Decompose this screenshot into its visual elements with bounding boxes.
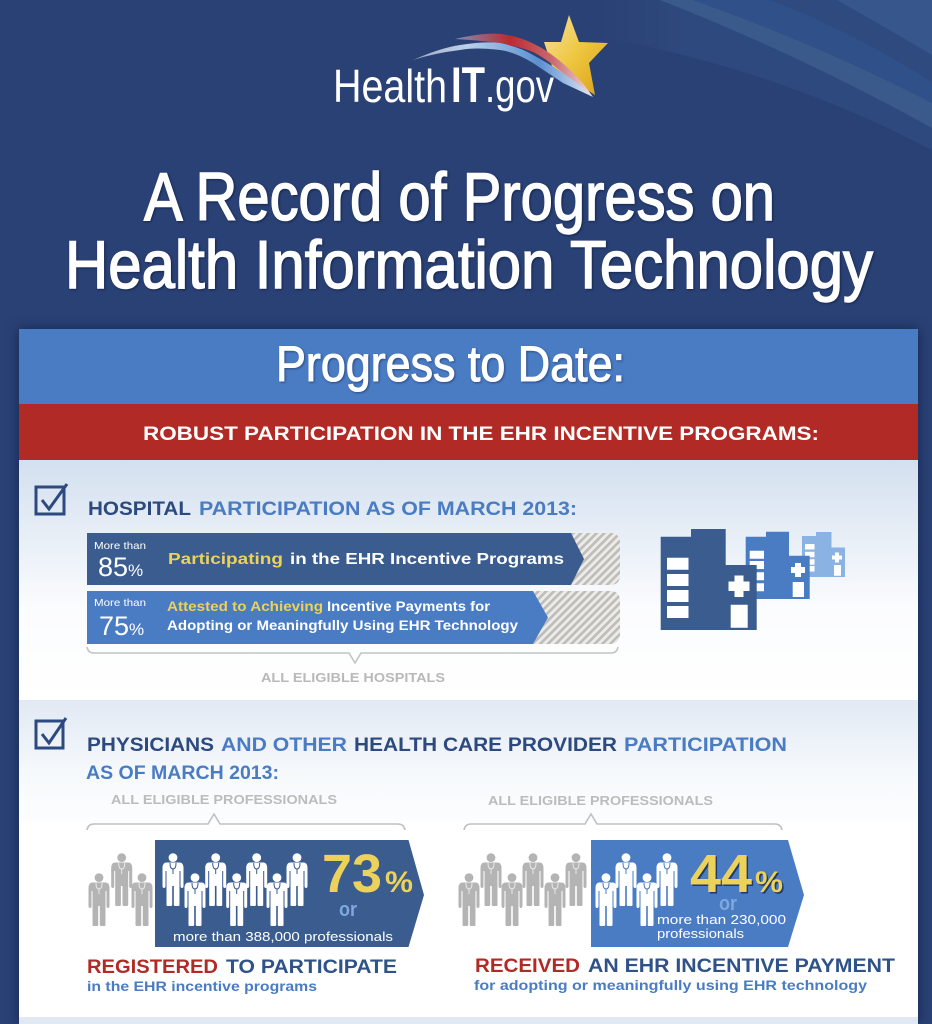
heading: physicians participation: PHYSICIANS bbox=[87, 735, 214, 756]
section: physician participation bbox=[19, 700, 918, 994]
caption: received an EHR incentive payment bbox=[474, 956, 895, 993]
caption: received an EHR incentive payment: RECEIVED bbox=[475, 956, 580, 977]
icon: checkbox bbox=[36, 718, 66, 748]
icon: small hospital bbox=[802, 532, 845, 577]
stat: 44 percent: 44 bbox=[690, 844, 752, 904]
arrow: 73 percent bbox=[155, 840, 424, 947]
title bbox=[65, 159, 873, 303]
panel background bbox=[19, 329, 918, 1024]
bar: 85 percent participating: Participating bbox=[168, 551, 283, 568]
logo wordmark: Health bbox=[333, 60, 447, 112]
caption: registered to participate: REGISTERED bbox=[87, 957, 218, 978]
caption: received an EHR incentive payment: for adopting or meaningfully using EHR technology bbox=[474, 977, 867, 993]
logo wordmark: .gov bbox=[485, 60, 554, 112]
logo: HealthIT.gov bbox=[333, 15, 608, 113]
stat: 44 percent: % bbox=[756, 868, 784, 900]
stat: 44 percent: % bbox=[755, 866, 783, 899]
bar: 85 percent participating: More than bbox=[94, 540, 146, 552]
bar: 75 percent attested: Attested to Achieving bbox=[167, 599, 323, 614]
icon: star bbox=[544, 15, 608, 95]
caption: registered to participate bbox=[87, 957, 397, 994]
caption: registered to participate: TO PARTICIPATE bbox=[226, 957, 397, 978]
heading: physicians participation: HEALTH CARE PROVIDER bbox=[354, 735, 617, 756]
bar: 75 percent attested: More than bbox=[94, 597, 146, 609]
label: all eligible professionals right: ALL ELIGIBLE PROFESSIONALS bbox=[488, 793, 713, 808]
heading: physicians participation: AS OF MARCH 2013: bbox=[86, 763, 279, 784]
label: or: or bbox=[339, 899, 357, 921]
bracket: right bbox=[464, 814, 782, 830]
decorative swooshes bbox=[600, 0, 932, 150]
bar: 85 percent participating: 85% bbox=[98, 552, 143, 582]
panel: progress to date bbox=[19, 329, 918, 1024]
logo wordmark: IT bbox=[451, 57, 485, 113]
bar: 75 percent attested: Adopting or Meaningfully Using EHR Technology bbox=[167, 618, 519, 633]
label: 230,000 professionals: more than 230,000 bbox=[657, 912, 786, 927]
red band: robust participation: ROBUST PARTICIPATION IN THE EHR INCENTIVE PROGRAMS: bbox=[143, 423, 819, 445]
icon: medium hospital bbox=[746, 532, 810, 599]
label: all eligible hospitals: ALL ELIGIBLE HOSPITALS bbox=[261, 670, 445, 685]
label: 388,000 professionals: more than 388,000 professionals bbox=[173, 929, 394, 944]
heading: physicians participation bbox=[86, 735, 787, 784]
people: white left bbox=[162, 853, 308, 926]
bar: 75 percent attested: Incentive Payments for bbox=[327, 599, 491, 614]
icon: blue swoosh bbox=[413, 42, 593, 97]
bracket: all eligible hospitals bbox=[87, 647, 618, 663]
heading: physicians participation: PARTICIPATION bbox=[624, 735, 787, 756]
icon: red swoosh bbox=[455, 34, 593, 97]
red band: robust participation bbox=[19, 404, 918, 460]
label: 230,000 professionals: professionals bbox=[657, 926, 745, 941]
bar: 75 percent attested bbox=[87, 591, 620, 644]
label: or: or bbox=[719, 893, 737, 915]
stat: 44 percent: 44 bbox=[692, 846, 754, 906]
header band: progress to date bbox=[19, 329, 918, 404]
heading: hospital participation: PARTICIPATION AS OF MARCH 2013: bbox=[199, 499, 577, 520]
section: hospital participation bbox=[19, 460, 918, 700]
caption: registered to participate: in the EHR incentive programs bbox=[87, 978, 317, 994]
people: grey left bbox=[88, 853, 152, 926]
stat: 73 percent: 73 bbox=[322, 844, 382, 904]
icon: checkbox bbox=[36, 484, 67, 514]
stat: 73 percent: % bbox=[385, 866, 413, 899]
label: all eligible professionals left: ALL ELIGIBLE PROFESSIONALS bbox=[111, 792, 337, 807]
heading: physicians participation: AND OTHER bbox=[221, 735, 347, 756]
title: A Record of Progress on bbox=[144, 159, 775, 235]
bar: 75 percent attested: 75% bbox=[99, 611, 144, 641]
bar: 85 percent participating: in the EHR Incentive Programs bbox=[290, 551, 564, 568]
caption: received an EHR incentive payment: AN EHR INCENTIVE PAYMENT bbox=[588, 956, 895, 977]
arrow: 44 percent bbox=[591, 840, 804, 947]
bracket: left bbox=[87, 814, 405, 830]
people: grey right bbox=[458, 853, 586, 926]
label: 230,000 professionals bbox=[657, 912, 786, 941]
stat: 44 percent bbox=[690, 844, 784, 906]
heading: hospital participation: HOSPITAL bbox=[88, 499, 191, 520]
bar: 85 percent participating bbox=[87, 533, 620, 585]
next section edge bbox=[19, 1017, 918, 1024]
icon: large hospital bbox=[661, 529, 757, 630]
people: white right bbox=[596, 853, 678, 926]
header band: progress to date: Progress to Date: bbox=[276, 336, 625, 392]
